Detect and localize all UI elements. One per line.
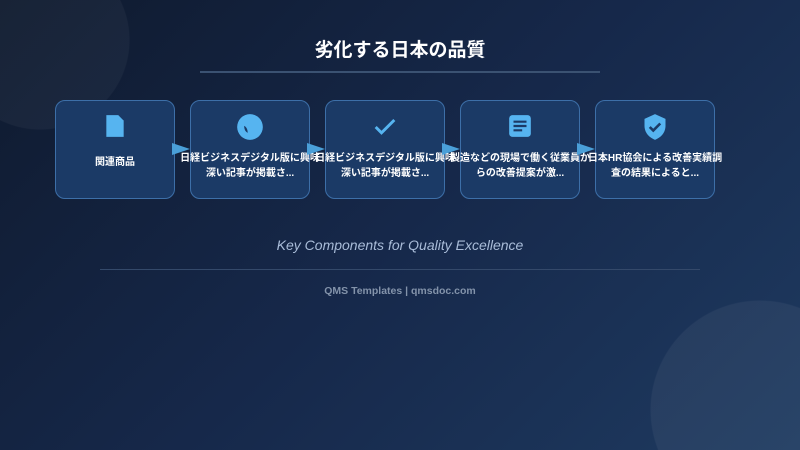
card 1 (55, 100, 175, 199)
icon: file (106, 115, 124, 137)
card 2 (190, 100, 310, 199)
card 3 (325, 100, 445, 199)
text 5: 査の結果によると... (611, 168, 699, 179)
icon: document (509, 115, 531, 137)
text 3: 日経ビジネスデジタル版に興味 (315, 153, 455, 164)
card 5 (595, 100, 715, 199)
text 3: 深い記事が掲載さ... (341, 168, 429, 179)
text 5: 日本HR協会による改善実績調 (588, 153, 722, 164)
text 4: 製造などの現場で働く従業員か (450, 153, 590, 164)
text 2: 日経ビジネスデジタル版に興味 (180, 153, 320, 164)
icon: shield (644, 114, 666, 140)
text 2 (180, 152, 320, 179)
text 4 (450, 152, 590, 179)
text 4: らの改善提案が激... (476, 168, 564, 179)
text 5 (588, 152, 722, 179)
subtitle: Key Components for Quality Excellence (277, 237, 523, 253)
arrow 2 (307, 143, 325, 155)
arrow 4 (577, 143, 595, 155)
footer: QMS Templates | qmsdoc.com (324, 285, 476, 297)
arrow 3 (442, 143, 460, 155)
icon: check (374, 119, 396, 135)
card 4 (460, 100, 580, 199)
title: 劣化する日本の品質 (314, 40, 486, 61)
arrow 1 (172, 143, 190, 155)
text 3 (315, 152, 455, 179)
icon: globe (237, 114, 263, 140)
text 1: 関連商品 (95, 157, 135, 168)
text 2: 深い記事が掲載さ... (206, 168, 294, 179)
